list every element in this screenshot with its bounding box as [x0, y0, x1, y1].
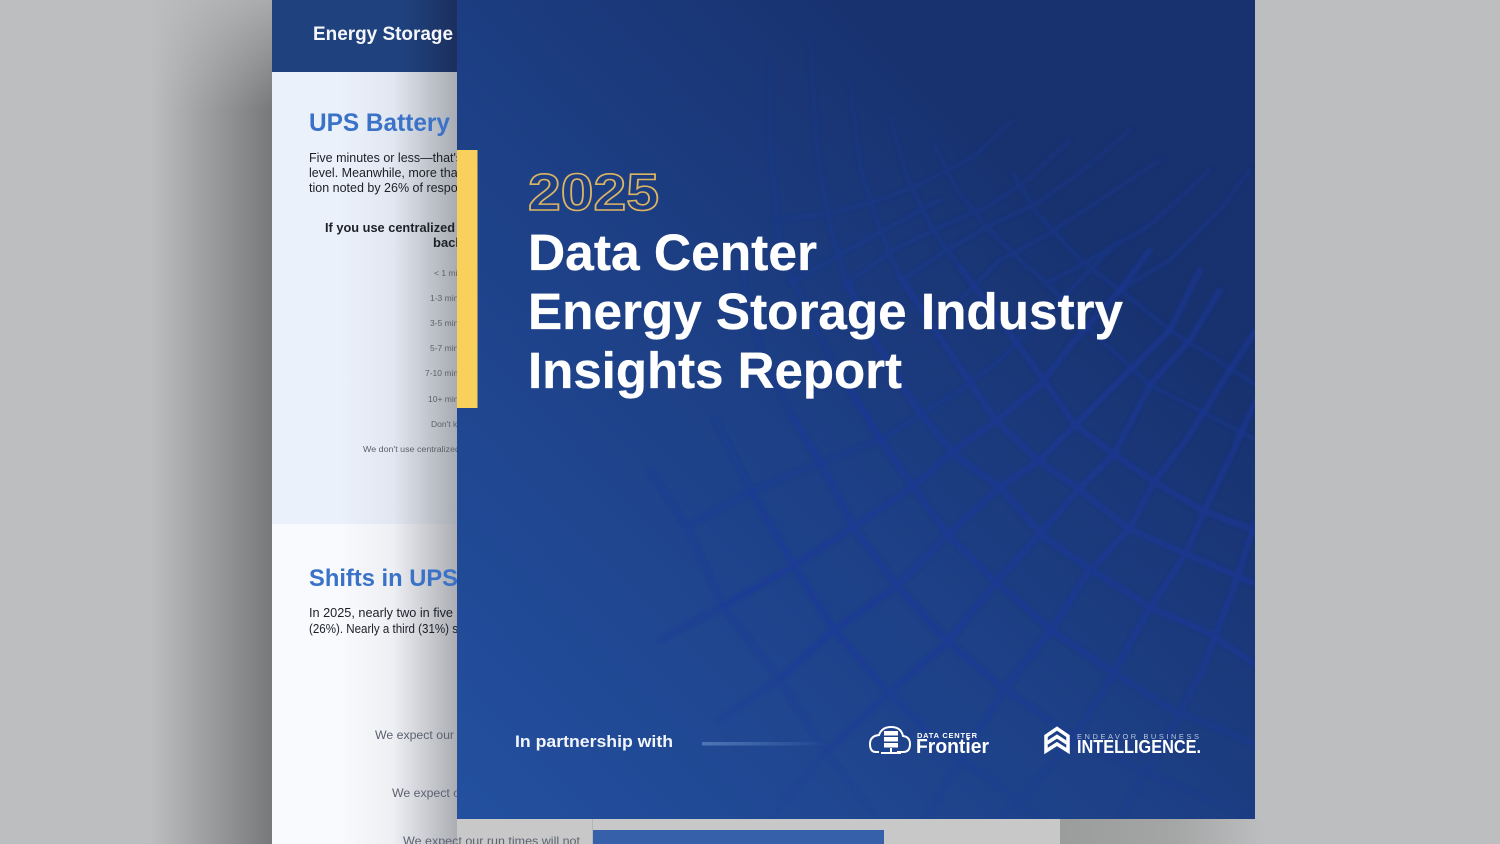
panel: UPS battery section: 5-7 min — [430, 343, 459, 353]
title — [528, 224, 1124, 399]
panel: UPS battery section: 1-3 min — [430, 293, 459, 303]
panel: shifts in UPS section: Shifts in UPS — [309, 565, 458, 592]
panel: shifts in UPS section: We expect our — [392, 786, 471, 800]
panel: shifts in UPS section: In 2025, nearly two in five — [309, 606, 453, 620]
year heading: 2025 — [528, 164, 659, 222]
panel: shifts in UPS section: We expect our — [375, 728, 454, 742]
panel: UPS battery section: We don't use centralized — [363, 444, 460, 454]
panel: back report page — [272, 0, 1060, 844]
panel: UPS battery section — [309, 109, 495, 454]
panel: UPS battery section: Five minutes or less—that's — [309, 151, 462, 165]
icon: chevron badge — [1046, 728, 1068, 751]
logo: Data Center Frontier: Frontier — [916, 736, 989, 758]
logo: Data Center Frontier: DATA CENTER — [917, 731, 978, 740]
logo: Endeavor Business Intelligence: ENDEAVOR BUSINESS — [1077, 732, 1199, 741]
logo: Data Center Frontier — [870, 727, 989, 758]
logo: Endeavor Business Intelligence — [1046, 728, 1201, 757]
panel: UPS battery section: 10+ min — [428, 394, 459, 404]
shadow beneath cover — [1060, 819, 1265, 844]
panel: UPS battery section: backup — [433, 235, 479, 250]
panel: UPS battery section: 7-10 min — [425, 368, 458, 378]
panel: UPS battery section: UPS Battery — [309, 109, 450, 137]
title: Insights Report — [528, 342, 902, 399]
panel: UPS battery section: Don't know — [431, 419, 474, 429]
panel: UPS battery section: < 1 min — [434, 268, 462, 278]
partnership label: In partnership with — [515, 732, 673, 751]
logo: Endeavor Business Intelligence: INTELLIGENCE. — [1077, 737, 1201, 757]
icon: cloud with server — [870, 727, 910, 754]
icon: yellow accent bar — [457, 150, 478, 408]
page backdrop shadow — [150, 0, 272, 844]
panel: shifts in UPS section — [309, 565, 581, 844]
divider rule — [702, 742, 827, 746]
panel: UPS battery section: 3-5 min — [430, 318, 459, 328]
bar chart fragment — [593, 830, 884, 844]
panel: shifts in UPS section: (26%). Nearly a third (31%) s — [309, 622, 458, 636]
panel: report cover — [457, 0, 1256, 819]
title: Data Center — [528, 224, 817, 281]
decorative mesh grid — [720, 120, 1255, 744]
title: Energy Storage Industry — [528, 283, 1124, 340]
panel: UPS battery section: tion noted by 26% of respondents — [309, 181, 495, 195]
panel: UPS battery section: If you use centralized — [325, 220, 455, 235]
back page header text: Energy Storage — [313, 24, 453, 45]
panel: UPS battery section: level. Meanwhile, more than — [309, 166, 465, 180]
